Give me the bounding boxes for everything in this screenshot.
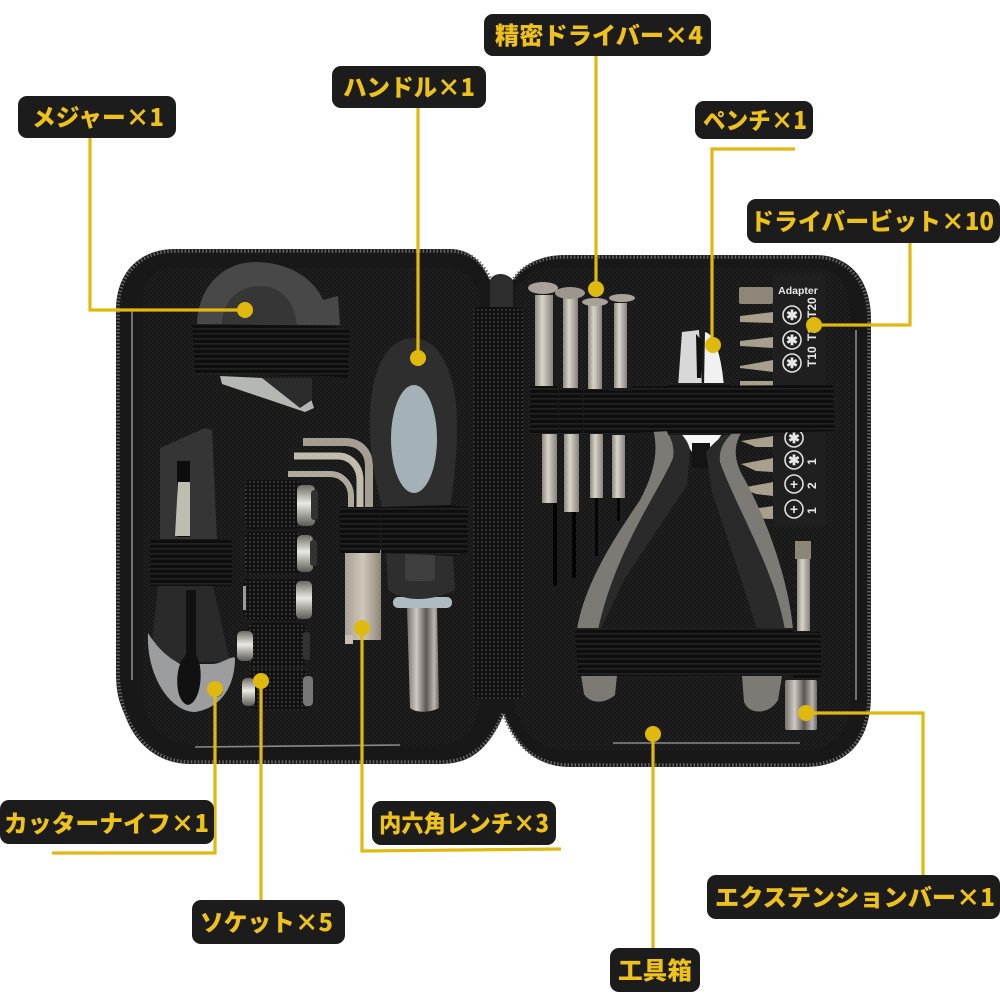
label: hex wrench: 内六角レンチ×3 — [379, 804, 549, 839]
bit icons — [783, 306, 803, 518]
label: case — [610, 948, 700, 992]
shaft — [407, 606, 439, 712]
leader: case — [645, 726, 661, 948]
tape blade housing — [220, 376, 314, 412]
extension loop — [793, 632, 821, 679]
sleeve — [785, 680, 817, 730]
socket 1 — [245, 480, 318, 529]
adapter text: Adapter — [778, 285, 818, 297]
icon glyphs: + — [790, 476, 798, 492]
right handle grey — [720, 424, 793, 630]
utility knife — [148, 428, 235, 712]
grey oval inset — [391, 385, 437, 493]
screwdriver handle — [370, 338, 468, 712]
bit holder — [739, 273, 825, 527]
knife upper body — [160, 428, 217, 540]
jaw loop — [668, 383, 730, 435]
label: case: 工具箱 — [618, 951, 692, 986]
size labels: T20 — [805, 297, 819, 318]
socket 5 — [242, 669, 313, 710]
leader: socket — [253, 673, 269, 900]
label: extension bar: エクステンションバー×1 — [715, 878, 995, 913]
leader: knife — [52, 681, 223, 853]
metal bits — [739, 287, 773, 519]
size labels: 1 — [805, 458, 819, 465]
screwdriver 2 — [555, 287, 585, 578]
icon glyphs: ✱ — [788, 430, 800, 446]
elastic straps over tools — [530, 383, 835, 679]
jaws — [678, 330, 702, 387]
left handle black — [578, 419, 690, 630]
pivot — [678, 431, 724, 452]
socket 4 — [237, 623, 310, 667]
icon glyphs — [786, 307, 800, 517]
knife grey base — [148, 633, 235, 712]
left handle tip — [581, 675, 617, 702]
leader: extension bar — [798, 705, 923, 875]
icon glyphs: ✱ — [786, 332, 798, 348]
collar — [393, 597, 452, 608]
lower strap — [575, 628, 793, 676]
icon glyphs: ✱ — [786, 307, 798, 323]
label: bits: ドライバービット×10 — [750, 202, 994, 237]
knife blade slot — [177, 461, 190, 537]
tape strap — [192, 324, 350, 378]
leader: bits — [806, 243, 910, 333]
knife hole — [209, 683, 223, 697]
centre spine — [473, 307, 523, 699]
screwdriver 4 — [609, 294, 635, 521]
leader: measure — [90, 138, 253, 318]
zipper edge — [118, 251, 869, 765]
left handle grey — [577, 419, 673, 630]
hex wrenches — [288, 442, 381, 644]
right handle tip — [742, 676, 782, 712]
tape centre disc — [222, 286, 297, 325]
ratchet slider — [405, 552, 435, 581]
tool case — [116, 249, 871, 767]
knife slider — [177, 590, 201, 705]
case right half — [490, 255, 871, 767]
label: handle: ハンドル×1 — [343, 68, 475, 103]
extension bar — [785, 541, 817, 730]
size labels: T10 — [805, 346, 819, 367]
holder plate — [773, 273, 825, 527]
size labels — [805, 297, 819, 514]
leader: handle — [410, 108, 426, 366]
sockets — [237, 480, 318, 710]
knife lower body — [150, 585, 230, 662]
precision screwdrivers — [528, 282, 635, 586]
right handle black — [706, 424, 792, 630]
top strap — [632, 385, 835, 434]
label: socket: ソケット×5 — [200, 903, 333, 938]
screwdriver 1 — [528, 282, 558, 586]
label: precision drivers: 精密ドライバー×4 — [495, 16, 703, 51]
size labels: 2 — [805, 482, 819, 489]
hex shank — [795, 541, 811, 559]
lining left — [143, 268, 480, 745]
leader: pliers — [705, 149, 795, 353]
leader: precision drivers — [588, 56, 604, 297]
icon glyphs: ✱ — [788, 452, 800, 468]
label: measure: メジャー×1 — [32, 98, 164, 133]
tape measure — [192, 262, 350, 412]
size labels: 1 — [805, 507, 819, 514]
socket 2 — [245, 532, 317, 574]
label: pliers: ペンチ×1 — [703, 101, 807, 136]
icon glyphs: ✱ — [786, 355, 798, 371]
screwdriver 3 — [582, 298, 608, 556]
socket 3 — [243, 578, 312, 620]
label: knife: カッターナイフ×1 — [4, 804, 209, 839]
grip — [370, 338, 457, 599]
icon glyphs: + — [790, 501, 798, 517]
screwdriver loops — [530, 386, 558, 434]
pliers — [577, 330, 793, 712]
spine top tab — [490, 274, 513, 307]
tape body — [197, 262, 340, 325]
label: socket — [192, 900, 345, 944]
size labels: T15 — [805, 320, 819, 341]
lining right — [515, 268, 850, 750]
case left half — [116, 249, 505, 764]
knife strap — [150, 539, 232, 586]
strap — [380, 505, 468, 556]
binding lines — [132, 310, 856, 747]
leader: hex wrench — [354, 620, 561, 851]
